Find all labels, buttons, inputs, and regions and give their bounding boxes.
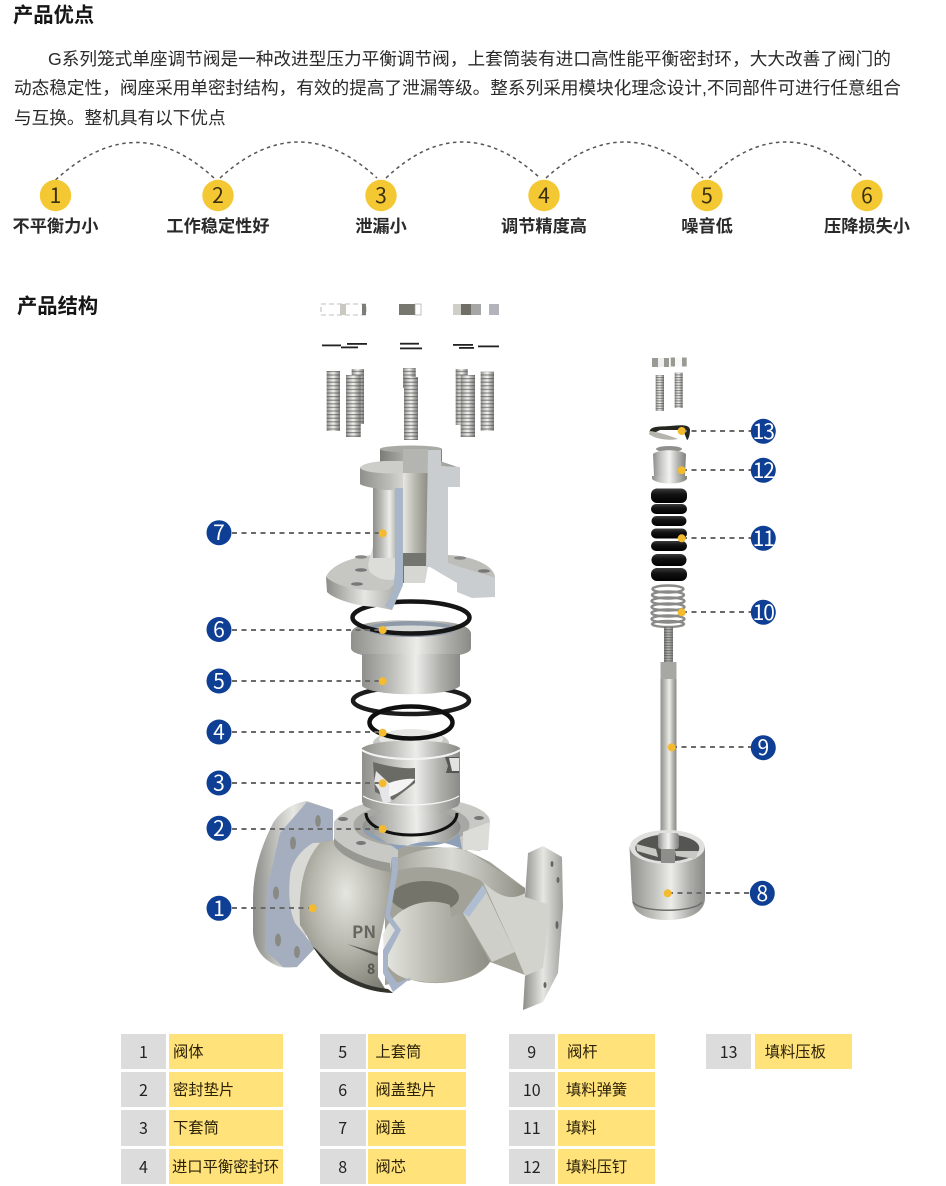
numbered callout badges: 3 [213,768,225,798]
advantage timeline graphic [40,141,883,212]
numbered callout badges: 8 [756,878,768,908]
neck [373,488,403,558]
bore [403,473,428,553]
parts table: column 1: 3 [139,1115,148,1139]
parts table: column 1: 4 [139,1154,148,1178]
parts table: column 3: 填料弹簧 [566,1082,627,1099]
parts table: column 2: 阀盖 [375,1120,406,1137]
callout lines [232,431,751,908]
advantage timeline graphic: 5 [701,180,713,210]
left cut section [385,488,403,610]
parts table: column 3: 12 [523,1154,541,1178]
top flange [334,797,490,870]
left flange rim [326,572,403,610]
text block: introduction paragraph: G系列笼式单座调节阀是一种改进型压力平衡调节阀，上套筒装有进口高性能平衡密封环，大大改善了阀门的 [48,49,891,69]
advantage timeline graphic: 2 [212,180,224,210]
part 11: black packing stack [651,488,687,581]
parts table: column 4: 填料压板 [765,1044,826,1060]
text block: introduction paragraph: 与互换。整机具有以下优点 [14,108,226,128]
numbered callout badges [206,416,776,923]
numbered callout badges: 6 [213,614,225,644]
parts table: column 1: 阀体 [173,1044,204,1060]
right cut section [426,450,495,598]
parts table: column 2: 8 [338,1154,347,1178]
parts table: column 2 [320,1034,466,1184]
parts table: column 2: 上套筒 [375,1044,421,1060]
parts table: column 1: 进口平衡密封环 [172,1158,279,1176]
text block: introduction paragraph [14,49,901,128]
parts table: column 3: 11 [523,1115,541,1139]
numbered callout badges: 11 [753,523,774,553]
seat ring [391,881,459,913]
right flange top face [446,555,495,578]
seat recess [354,803,470,847]
parts table: column 3: 10 [523,1077,541,1101]
top washers [322,343,499,349]
parts table: column 1: 密封垫片 [173,1082,234,1099]
advantage label 1: 不平衡力小 [13,216,98,236]
left flange rim [253,801,333,968]
parts table: column 1: 1 [139,1038,148,1062]
parts table: column 2: 7 [338,1115,347,1139]
numbered callout badges: 1 [213,893,225,923]
parts table: column 3: 9 [527,1038,536,1062]
advantage timeline graphic: 6 [861,180,873,210]
top boss [380,449,442,473]
body marking: PN [352,918,376,943]
top nuts [321,304,499,315]
advantage label 5: 噪音低 [681,216,733,236]
numbered callout badges: 7 [213,517,225,547]
upper flange [360,461,460,490]
seat wedge [463,885,515,962]
parts table: column 3: 填料压钉 [566,1158,627,1176]
body cavity [385,846,525,985]
parts table: column 3: 填料 [566,1120,597,1137]
numbered callout badges: 5 [213,666,225,696]
upper arch [392,847,525,899]
part 1: valve body [253,797,563,1010]
right stack: nuts and bolts [652,358,687,411]
parts table: column 1: 下套筒 [173,1120,219,1137]
left flange top face [326,555,403,590]
cut section [383,857,412,992]
right flange [523,846,563,1010]
heading: product advantages: 产品优点 [13,5,94,27]
parts table: column 4 [706,1034,852,1069]
outlet [483,882,552,976]
callout dots [309,427,686,912]
parts table: column 4: 13 [720,1038,738,1062]
part 13: packing plate [649,425,690,440]
part 12: packing gland [652,446,687,484]
part 1: valve body: 8 [367,959,375,979]
heading: product structure: 产品结构 [17,296,98,318]
parts table: column 1 [121,1034,283,1184]
numbered callout badges: 13 [753,416,774,446]
part 3: lower sleeve [362,729,460,814]
numbered callout badges: 10 [753,597,774,627]
lower bulb [383,902,490,982]
part 4: O-ring seal [370,706,452,738]
part 2: sealing gasket [366,813,457,835]
text block: introduction paragraph: 动态稳定性，阀座采用单密封结构，有效的提高了泄漏等级。整系列采用模块化理念设计,不同部件可进行任意组合 [14,78,901,98]
parts table: column 2: 5 [338,1038,347,1062]
advantage timeline graphic: 3 [375,180,387,210]
parts table: column 3 [509,1034,655,1184]
advantage timeline graphic: 4 [538,180,550,210]
parts table: column 2: 6 [338,1077,347,1101]
parts table: column 2: 阀芯 [375,1158,406,1176]
neck fillet [368,546,403,580]
bowl lower shadow [313,947,393,993]
numbered callout badges: 4 [213,716,225,746]
advantage label 2: 工作稳定性好 [166,216,270,236]
numbered callout badges: 12 [753,455,774,485]
left flange face [265,802,333,967]
part 6: bonnet gasket [352,602,470,634]
parts table: column 1: 2 [139,1077,148,1101]
lower black gasket [353,687,469,714]
advantage label 6: 压降损失小 [824,216,910,236]
inner lip [289,843,320,930]
numbered callout badges: 9 [757,732,769,762]
part 8: valve plug [630,830,705,920]
parts table: column 3: 阀杆 [567,1044,598,1060]
part 5: upper sleeve [351,620,471,694]
bowl [300,840,392,992]
advantage label 4: 调节精度高 [501,216,587,236]
numbered callout badges: 2 [213,813,225,843]
part 7: bonnet [326,446,495,610]
part 10: packing spring [652,586,684,627]
advantage label 3: 泄漏小 [355,216,407,236]
advantage timeline graphic: 1 [50,180,61,210]
part 9: valve stem [660,627,676,834]
parts table: column 2: 阀盖垫片 [375,1082,437,1099]
top studs [327,368,494,440]
